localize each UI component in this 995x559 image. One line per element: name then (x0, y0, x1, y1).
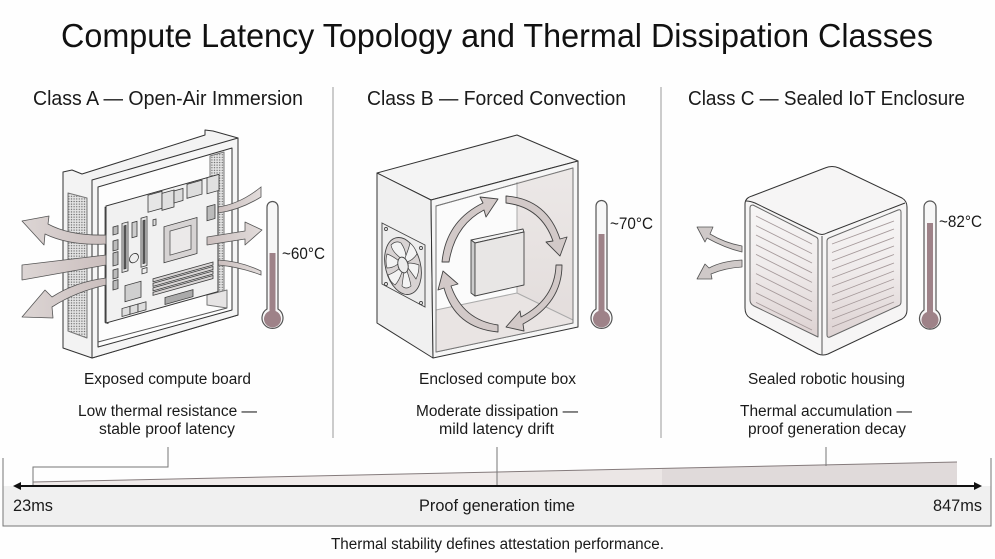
axis labels: 847ms (933, 497, 982, 515)
illustration: enclosed box (377, 135, 578, 358)
heading: class B: Class B — Forced Convection (367, 87, 626, 110)
timeline bracket (3, 458, 991, 526)
airflow arrows right behind board (218, 187, 261, 275)
temperature label B: ~70°C (610, 214, 653, 233)
axis labels: Proof generation time (419, 497, 575, 515)
latency wedge (33, 462, 957, 486)
thermometer C (920, 201, 940, 329)
temperature label C: ~82°C (939, 212, 982, 231)
caption B (416, 371, 578, 438)
title: Compute Latency Topology and Thermal Dissipation Classes (61, 17, 933, 54)
airflow arrows (22, 216, 262, 318)
heading: class C: Class C — Sealed IoT Enclosure (688, 87, 965, 110)
vent slats (756, 216, 894, 330)
illustration: open frame (63, 130, 238, 358)
illustration: sealed housing (745, 166, 907, 355)
convection arrows (438, 196, 567, 332)
caption C: Thermal accumulation — (740, 403, 912, 420)
caption A (78, 371, 257, 438)
leader lines (33, 447, 826, 486)
divider left (332, 87, 334, 438)
divider right (660, 87, 662, 438)
latency timeline (3, 447, 991, 526)
caption B: Moderate dissipation — (416, 403, 578, 420)
caption B: Enclosed compute box (419, 371, 576, 388)
illustration: compute board (105, 174, 219, 324)
temperature label A: ~60°C (282, 244, 325, 263)
caption C (740, 371, 912, 438)
caption A: Low thermal resistance — (78, 403, 257, 420)
airflow arrows C (697, 227, 742, 279)
panel: class A open-air immersion (22, 87, 325, 438)
panel: class B forced convection (367, 87, 653, 438)
caption C: Sealed robotic housing (748, 371, 905, 388)
thermometer B (591, 201, 612, 328)
icon: fan (379, 223, 427, 307)
axis arrow (13, 482, 982, 490)
panel: class C sealed IoT enclosure (688, 87, 982, 438)
compute chip (471, 229, 524, 296)
caption B: mild latency drift (439, 421, 555, 438)
axis labels: 23ms (13, 497, 53, 515)
axis labels (13, 497, 982, 515)
caption C: proof generation decay (748, 421, 906, 438)
caption A: stable proof latency (99, 421, 235, 438)
caption A: Exposed compute board (84, 371, 251, 388)
footer note: Thermal stability defines attestation performance. (331, 536, 664, 553)
heading: class A: Class A — Open-Air Immersion (33, 87, 303, 110)
thermometer A (262, 202, 283, 328)
timeline band (3, 486, 991, 526)
